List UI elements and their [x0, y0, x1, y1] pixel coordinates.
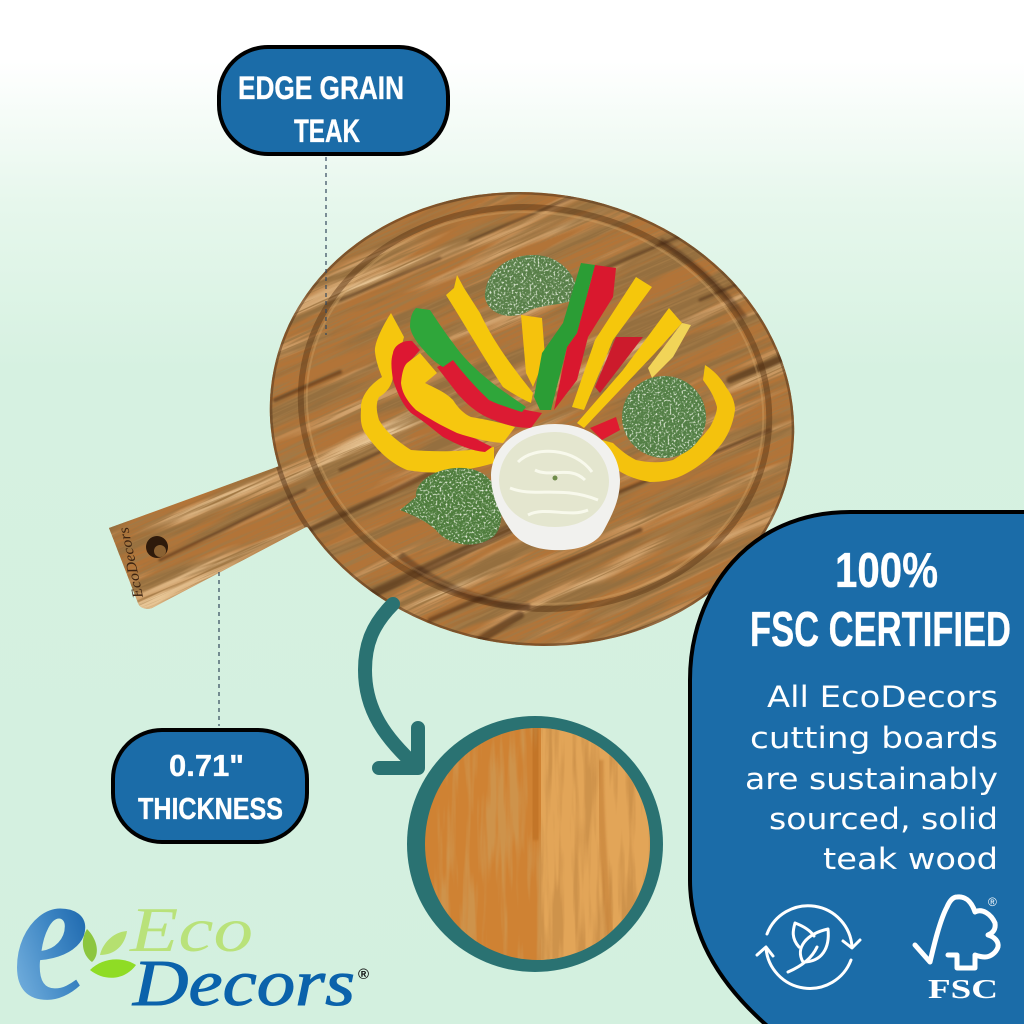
- panel body text: teak wood: [823, 842, 998, 876]
- logo: EcoDecors: [13, 830, 369, 1024]
- logo word Decors: Decors: [132, 947, 355, 1020]
- panel body text: All EcoDecors: [767, 680, 998, 714]
- red pepper: left ring: [391, 341, 492, 452]
- panel body text: cutting boards: [750, 721, 998, 755]
- callout pill: edge grain teak: [219, 47, 448, 154]
- curved arrow to wood detail: [365, 604, 418, 768]
- callout pill: edge grain teak: TEAK: [294, 113, 360, 149]
- wood grain detail circle: [407, 716, 663, 972]
- yellow pepper: right ring: [602, 365, 735, 482]
- red pepper under green: [437, 360, 542, 428]
- green pepper: left strip: [410, 308, 526, 412]
- icon: FSC tree logo: [915, 895, 998, 1004]
- icon: recycling leaf: [757, 906, 860, 988]
- yellow strip: far right: [577, 308, 682, 428]
- juice groove: [298, 204, 772, 612]
- pale yellow sliver: [648, 323, 691, 378]
- yellow strip: small: [521, 315, 545, 387]
- yellow pepper: inner ring: [401, 353, 515, 443]
- logo leaves: [83, 929, 136, 978]
- icon: FSC tree logo: FSC: [928, 974, 998, 1004]
- green pepper: upright: [534, 263, 595, 410]
- callout pill: thickness: [113, 730, 307, 842]
- red pepper: upright: [554, 265, 616, 410]
- dashed leader line: edge grain: [325, 157, 327, 335]
- broccoli: top: [485, 255, 575, 316]
- panel background: [690, 512, 1024, 1024]
- icon: FSC tree logo: ®: [988, 895, 997, 909]
- red pepper: right: [595, 337, 643, 393]
- handle hole: [146, 536, 168, 558]
- panel body text: sourced, solid: [769, 802, 998, 836]
- panel body text: are sustainably: [745, 762, 998, 796]
- broccoli: lower left: [400, 468, 502, 544]
- broccoli: right: [620, 374, 708, 460]
- callout pill: thickness: THICKNESS: [138, 791, 283, 826]
- panel heading: 100%: [835, 544, 938, 598]
- board wood surface: [109, 192, 794, 646]
- dark grain streaks: [160, 190, 790, 640]
- logo registered mark: ®: [358, 966, 369, 983]
- panel: FSC certification: [690, 512, 1024, 1024]
- dashed leader line: thickness: [218, 572, 220, 726]
- callout pill: thickness: 0.71": [169, 748, 244, 783]
- yellow strip: long: [446, 275, 533, 403]
- callout pill: edge grain teak: EDGE GRAIN: [238, 70, 404, 106]
- dip ramekin: [491, 424, 620, 550]
- handle brand text: EcoDecors: [116, 526, 147, 601]
- yellow pepper: left ring: [361, 313, 494, 472]
- logo word Eco: Eco: [129, 894, 253, 965]
- yellow strip: right upright: [572, 277, 652, 410]
- cutting board with vegetables: [109, 192, 794, 646]
- panel body text: [745, 680, 998, 876]
- red fragment: [590, 417, 620, 440]
